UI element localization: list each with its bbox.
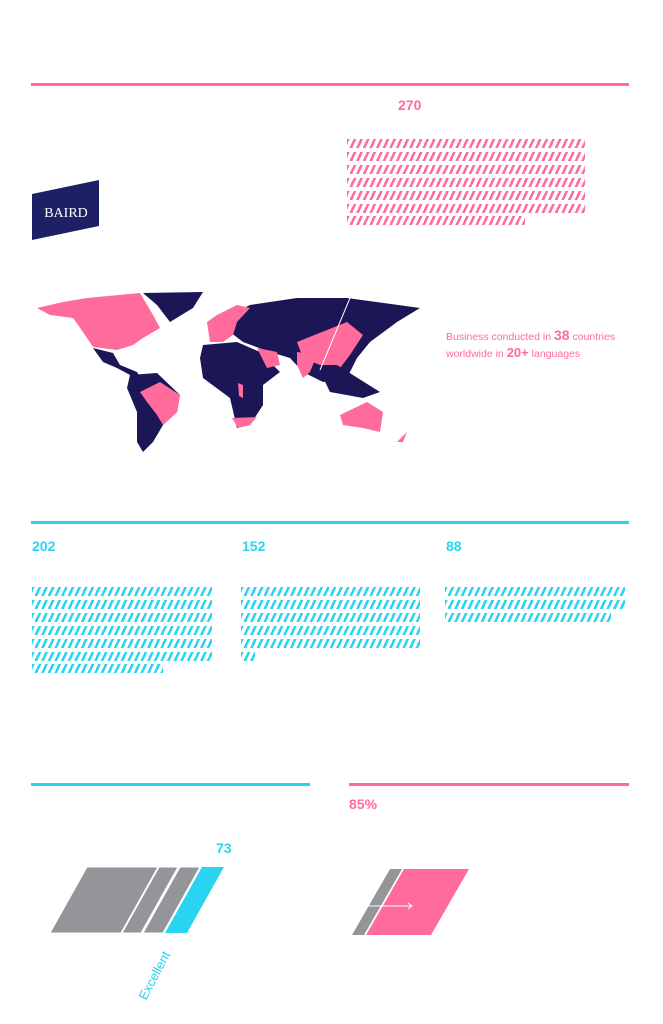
label: Excellent: Excellent <box>135 949 173 1002</box>
pictogram: 270 hatch rows <box>347 139 585 225</box>
middle cyan rule <box>31 521 629 524</box>
logo: Baird <box>32 180 99 240</box>
stat: 270: 270 <box>398 97 421 113</box>
85% chart <box>352 869 469 935</box>
world map <box>37 292 420 452</box>
stat: 88: 88 <box>446 538 462 554</box>
stat: 202: 202 <box>32 538 55 554</box>
pictogram: 152 <box>241 587 420 661</box>
stat: 73: 73 <box>216 840 232 856</box>
map caption: Business conducted in 38 countries worldwide in 20+ languages <box>446 327 615 360</box>
rating chart <box>51 867 224 933</box>
stat: 152: 152 <box>242 538 265 554</box>
bottom-right pink rule <box>349 783 629 786</box>
stat: 85%: 85% <box>349 796 377 812</box>
bottom-left cyan rule <box>31 783 310 786</box>
logo: Baird: BAIRD <box>44 206 88 221</box>
pictogram: 202 <box>32 587 212 673</box>
top pink rule <box>31 83 629 86</box>
pictogram: 88 <box>445 587 625 622</box>
